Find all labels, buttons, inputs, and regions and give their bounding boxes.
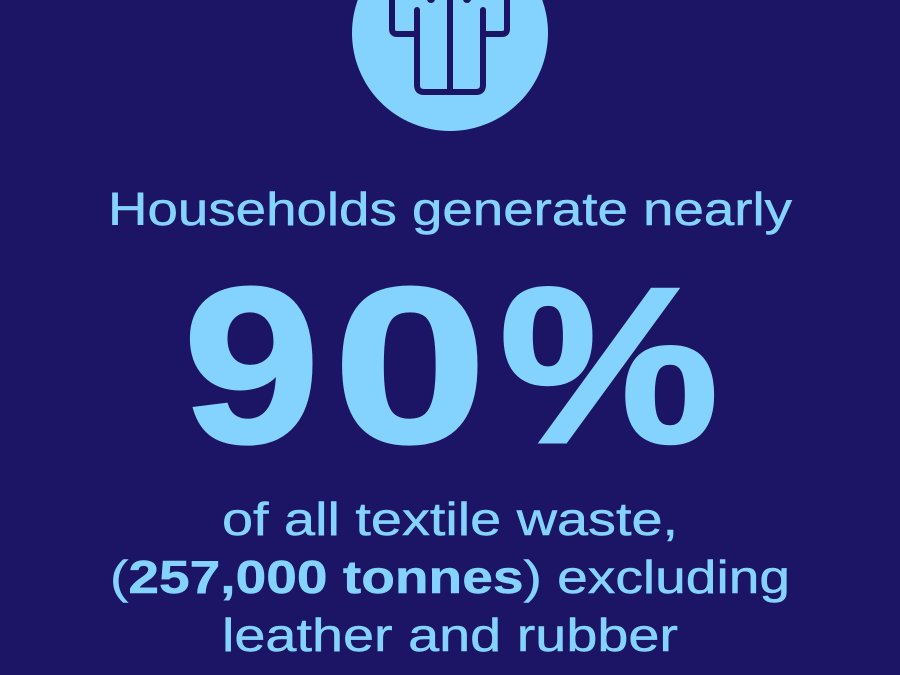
description text [110, 493, 790, 661]
icon: shirt in circle [352, 0, 548, 131]
big number: 90%: 9 [183, 242, 320, 490]
description text: (257,000 tonnes ) excluding [110, 551, 790, 603]
big number: 90%: 0 [333, 242, 487, 490]
description text: of all textile waste, [222, 493, 678, 545]
description text: leather and rubber [222, 609, 678, 661]
big number: 90% [183, 242, 719, 490]
heading: households generate nearly: Households generate nearly [108, 183, 792, 235]
big number: 90%: % [499, 242, 719, 490]
